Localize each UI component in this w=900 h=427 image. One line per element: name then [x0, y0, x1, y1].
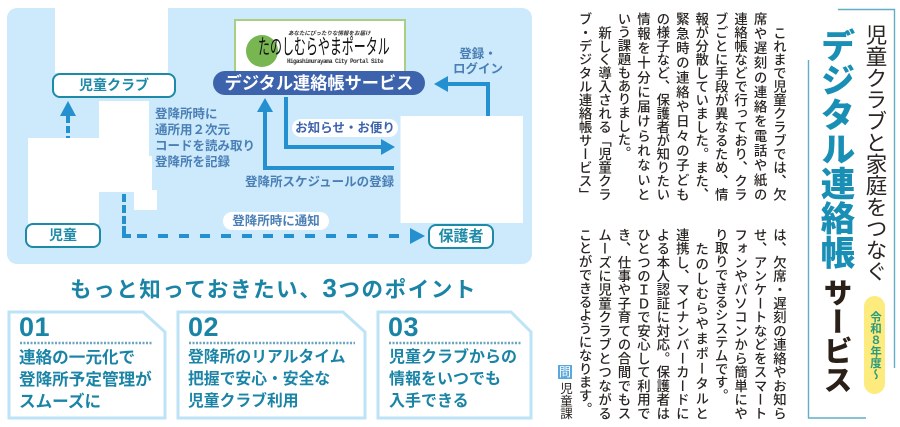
body text: lower block: よる本人認証に対応。保護者は	[654, 228, 669, 420]
badge: from Reiwa 8	[864, 296, 885, 394]
card 03 text: 入手できる	[389, 393, 469, 410]
card 01 text: 登降所予定管理が	[19, 370, 152, 389]
title block	[815, 24, 887, 394]
card 03 text: 情報をいつでも	[389, 371, 501, 388]
label: schedule registration: 登降所スケジュールの登録	[245, 175, 394, 189]
label: check-in steps: 通所用２次元	[155, 123, 230, 137]
body text: upper block: ブごとに手段が異なるため、情	[713, 12, 728, 201]
label: notices pill: お知らせ・お便り	[295, 121, 395, 135]
title line 3: サービス	[819, 278, 851, 394]
body text: lower block: ムーズに児童クラブとつながる	[596, 228, 611, 420]
body text: lower block: り取りできるシステムです。	[713, 228, 728, 402]
service name pill: デジタル連絡帳サービス	[225, 73, 413, 93]
heading: three points: もっと知っておきたい、3つのポイント	[70, 273, 477, 303]
label: check-in steps: 登降所を記録	[155, 155, 230, 169]
label: check-in steps: 登降所時に	[155, 107, 218, 121]
logo tagline: あなたにぴったりな情報をお届け	[288, 31, 371, 37]
label: register and login: ログイン	[453, 62, 503, 76]
body text: upper block: 情報を十分に届けられないと	[635, 12, 650, 201]
card 03 text: 児童クラブからの	[389, 349, 517, 366]
card 01 text: スムーズに	[19, 392, 101, 411]
body text: lower block: フォンやパソコンから簡単にや	[732, 228, 747, 420]
node: child: 児童	[49, 227, 77, 243]
body text: lower block: せ、アンケートなどをスマート	[752, 228, 767, 420]
label: register and login: 登録・	[459, 47, 497, 61]
body text: upper block: の様子など、保護者が知りたい	[654, 12, 669, 201]
body text: lower block	[577, 228, 786, 420]
card 03 text	[389, 348, 517, 410]
body text: upper block: 連絡帳などで行っており、クラ	[732, 12, 747, 201]
node: guardian: 保護者	[438, 228, 484, 245]
body text: lower block: は、欠席・遅刻の連絡やお知ら	[771, 228, 786, 420]
badge: from Reiwa 8: 令和８年度～	[869, 310, 881, 380]
label: check-in steps	[155, 107, 255, 169]
body text: upper block: 席や遅刻の連絡を電話や紙の	[752, 12, 767, 201]
body text: lower block: 連携し、マイナンバーカードに	[674, 228, 689, 420]
card 03	[388, 312, 517, 410]
card 02 text	[188, 348, 346, 410]
label: check-in notification pill	[223, 212, 329, 230]
icon: green circle	[246, 35, 278, 67]
number 01: 01	[19, 312, 50, 342]
body text: upper block: これまで児童クラブでは、欠	[771, 26, 786, 201]
body text: lower block: たのしむらやまポータルと	[693, 242, 708, 420]
body text: upper block	[577, 12, 786, 201]
icon: inquiry: 問	[559, 365, 571, 379]
node: children's club	[52, 73, 176, 98]
logo: tanoshimurayama portal	[234, 19, 406, 73]
card 02 text: 把握で安心・安全な	[188, 371, 330, 388]
logo name: たのしむらやまポータル	[258, 36, 390, 59]
body text: lower block: ことができるようになります。	[577, 228, 592, 416]
node: children's club: 児童クラブ	[79, 77, 149, 93]
label: register and login	[453, 47, 503, 76]
contact: children's section	[558, 365, 572, 420]
body text: lower block: き、仕事や子育ての合間でもス	[616, 228, 630, 420]
number 03: 03	[388, 312, 419, 342]
body text: upper block: いう課題もありました。	[616, 12, 630, 159]
title line 1: 児童クラブと家庭をつなぐ	[863, 24, 887, 282]
title line 2: デジタル連絡帳	[815, 28, 853, 270]
label: check-in notification pill: 登降所時に通知	[232, 214, 320, 228]
contact name: 児童課	[558, 382, 572, 420]
body text: upper block: 新しく導入される「児童クラ	[596, 26, 611, 201]
logo subtitle: Higashimurayama City Portal Site	[287, 58, 383, 65]
number 02: 02	[188, 312, 219, 342]
body text: lower block: ひとつのＩＤで安心して利用で	[635, 228, 650, 420]
card 02 text: 登降所のリアルタイム	[188, 349, 346, 366]
card 01 text	[19, 348, 152, 411]
card 01 text: 連絡の一元化で	[19, 348, 135, 367]
label: check-in steps: コードを読み取り	[155, 139, 255, 153]
node: child	[25, 223, 101, 248]
body text: upper block: ブ・デジタル連絡帳サービス」	[577, 12, 592, 201]
card 02	[188, 312, 346, 410]
node: guardian	[428, 224, 494, 249]
body text: upper block: 緊急時の連絡や日々の子ども	[674, 12, 689, 201]
card 01	[19, 312, 152, 411]
body text: upper block: 報が分散していました。また、	[693, 12, 708, 201]
panel: service diagram	[7, 8, 532, 264]
card 02 text: 児童クラブ利用	[188, 393, 299, 410]
